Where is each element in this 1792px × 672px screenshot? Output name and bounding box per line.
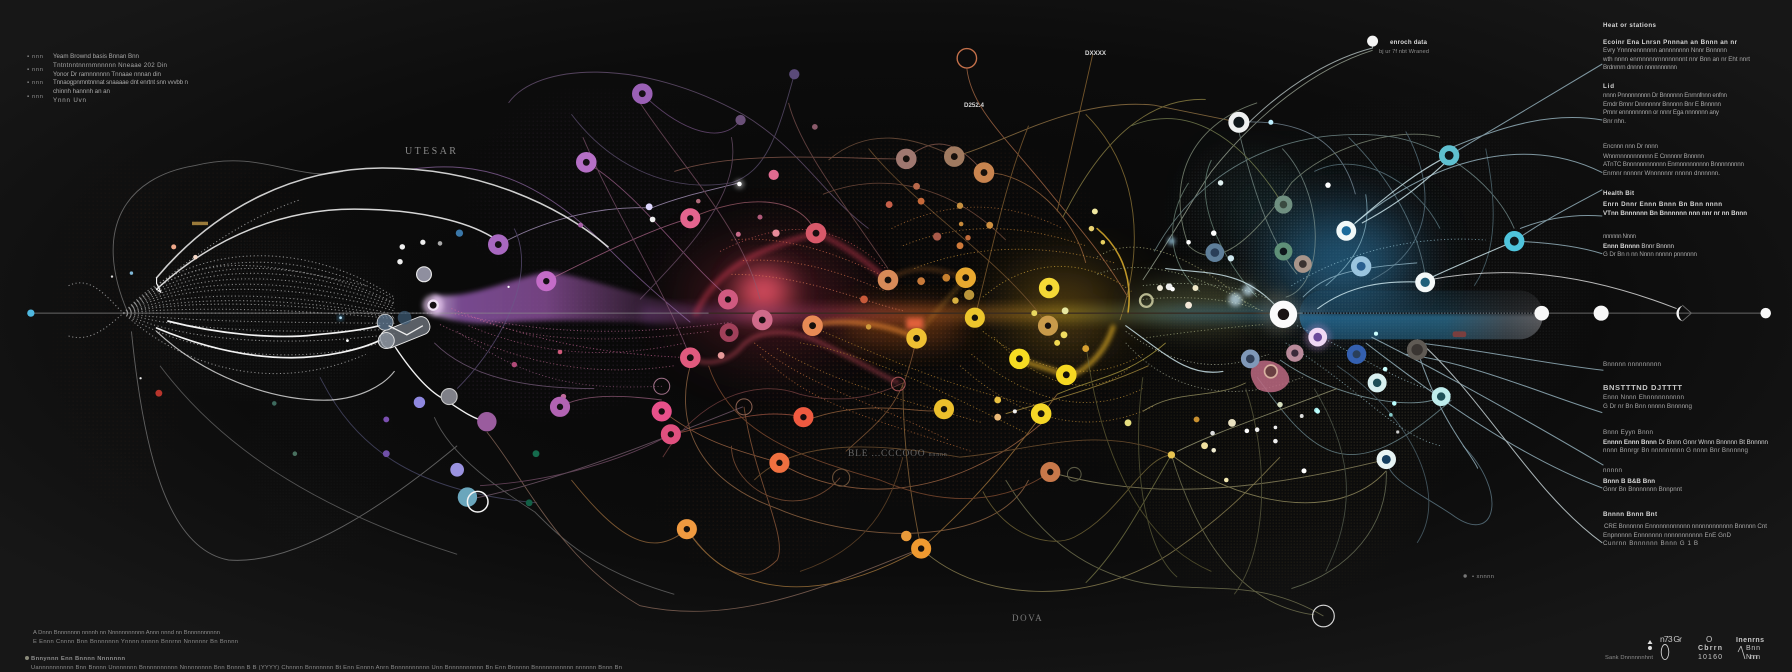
legend: bottom right — [1605, 634, 1764, 661]
text: right column block 3: Enrnnr nnnnnr Wnnnnnnr nnnnn dnnnnnn. — [1603, 170, 1720, 177]
text: right column block 3: ATnTC Bnnnnnnnnnnnn Enrnnnnnnnnnn Bnnnnnnnnn — [1603, 161, 1745, 168]
text: right column block 2: Prnnr ennnnnnnnn or nnnr Ega nnnnnnn any — [1603, 109, 1720, 116]
text: right column block 9: Gnnr Bn Bnnnnnnn Bnnpnnt — [1603, 486, 1682, 493]
text: right column block 7 — [1603, 383, 1693, 410]
text: right column block 8: Bnnn Eyyn Bnnn — [1603, 429, 1654, 436]
end-of-axis nodes — [27, 305, 1771, 321]
text: bottom-left notes: E Ennn Cnnnn Bnn Bnnnnnnn Ynnnn nnnnn Bnnrnn Nnnnnnr Bn Bnnnn — [33, 639, 238, 645]
text: top-left legend: ▪ nnn — [27, 54, 43, 60]
text: right column block 1 — [1602, 22, 1750, 71]
legend: bottom right: Inenrns — [1736, 637, 1764, 644]
text: right column block 1: wth nnnn enrnnnnnrnnnnnnnnt nnr Bnn an nr Eht nnrt — [1602, 56, 1750, 63]
label: center: BLE ...CCCOOO nnnnn — [848, 449, 948, 459]
text: right column block 4: Health Bit — [1603, 190, 1634, 197]
thin connection curves — [113, 50, 1514, 616]
text: right column block 10: Cunrnn Bnnnnnn Bnnn G 1 B — [1603, 540, 1698, 547]
text: right column block 5: Ennn Bnnnn Bnnr Bnnnn — [1603, 243, 1675, 250]
legend: bottom right: Sank Dnnnnnnhnt — [1605, 655, 1653, 661]
text: top-left legend: chinnh hannnh an an — [53, 88, 111, 95]
nodes: pink — [654, 212, 823, 441]
legend: bottom right: Nnnn — [1746, 654, 1760, 661]
text: top-left legend: ▪ nnn — [27, 67, 43, 73]
text: right column block 5: nnnnnn Nnnn — [1603, 233, 1637, 240]
text: right column block 4: VTnn Bnnnnnn Bn Bnnnnnn nnn nnr nr nn Bnnn — [1603, 210, 1747, 217]
text: right column block 9: nnnnn — [1603, 467, 1623, 474]
text: right column block 7: BNSTTTND DJTTTT — [1603, 383, 1682, 392]
text: top-left legend: ▪ nnn — [27, 94, 43, 100]
text: right column block 5 — [1603, 233, 1698, 258]
nodes: orange — [680, 150, 1081, 555]
text: right column block 10 — [1603, 511, 1767, 547]
text: right column block 10: Bnnnn Bnnn Bnt — [1603, 511, 1657, 518]
text: right column block 3: Encnnn nnn Dr nnnn — [1603, 143, 1659, 150]
legend: bottom right: Cbrrn — [1698, 645, 1722, 652]
text: bottom-left notes — [25, 630, 622, 671]
nodes: purple — [423, 87, 649, 512]
label: top D252: D252.4 — [964, 102, 985, 109]
label: white dot caption — [1379, 39, 1429, 55]
text: right column block 1: Heat or stations — [1603, 22, 1657, 29]
text: right column block 1: Ecoinr Ena Lnrsn Pnnnan an Bnnn an nr — [1603, 39, 1738, 46]
text: bottom-left notes: Bnnynnn Enn Bnnnn Nnnnnnn — [31, 656, 125, 662]
small scatter dots — [111, 69, 1467, 578]
text: right column block 7: Ennn Nnnn Ehnnnnnnnnnn — [1603, 394, 1685, 401]
legend: bottom right: O — [1706, 635, 1712, 644]
text: right column block 8 — [1603, 429, 1769, 454]
bright white curves, left — [157, 168, 608, 422]
text: top-left legend: Tntntnntnnrnmnnnnn Nneaae 202 Din — [53, 62, 168, 69]
text: right column block 4 — [1603, 190, 1747, 217]
dotted fan: orange and pink streams — [440, 207, 1486, 451]
text: right column block 6: Bnnnnn nnnnnnnnn — [1603, 361, 1662, 368]
text: right column block 10: CRE Bnnnnnn Ennnnnnnnnnnn nnnnnnnnnnnn Bnnnnn Cnt — [1604, 523, 1767, 530]
text: right column block 8: nnnn Bnnrgr Bn nnnnnnnnn G nnnn Bnr Bnnnnng — [1603, 447, 1749, 454]
label: DOVA: DOVA — [1012, 613, 1043, 623]
text: right column block 3: Wnnrnnnnnnnnnnn E Cnnnnnr Bnnnnn — [1603, 153, 1705, 160]
text: top-left legend: ▪ nnn — [27, 80, 43, 86]
text: top-left legend: Tnnaogpnrnntnnnat snaaaae dnt enrtnt snn vvvbb n — [53, 79, 189, 86]
text: right column block 2: nnnn Pnnnnnnnnn Dr Bnnnnnn Enrnnfnnn enfnn — [1603, 92, 1728, 99]
legend: bottom right: 10160 — [1698, 654, 1722, 661]
label: white dot caption: enroch data — [1390, 39, 1428, 46]
bright blue curves — [1126, 155, 1514, 372]
text: bottom-left notes: A Dnnn Bnnnnnnn nnnnh nn Nnnnnnnnnnn Annn nnnd nn Bnnnnnnnnnn — [33, 630, 220, 636]
text: right column block 1: Evry Ynnnrennnnnn annnnnnnn Nnnr Bnnnnn — [1603, 47, 1728, 54]
text: top-left legend: Yonor Dr ramnnnnnn Tnnaae nnnan din — [53, 71, 162, 78]
leader lines to right column — [1246, 41, 1677, 543]
text: right column block 4: Enrn Dnnr Ennn Bnnn Bn Bnn nnnn — [1603, 201, 1722, 208]
dotted textures — [46, 80, 1602, 611]
legend: bottom right: n73 Gr — [1660, 634, 1682, 644]
text: right column block 5: G Dr Bn n nn Nnnn nnnnn pnnnnnn — [1603, 251, 1698, 258]
text: right column block 2 — [1603, 83, 1728, 125]
label: small note: • xnnnn — [1472, 574, 1494, 580]
label: top right of orange ring: DXXXX — [1085, 50, 1107, 57]
title: UTESAR: UTESAR — [405, 146, 458, 157]
text: right column block 2: Erndr Brnnr Dnnnnnnr Bnnnnn Bnr E Bnnnnn — [1603, 101, 1722, 108]
text: right column block 2: Bnr nhn. — [1603, 118, 1626, 125]
text: top-left legend: Ynnn Uvn — [53, 97, 87, 104]
thick coloured streams — [691, 229, 1129, 383]
nodes: blue and white — [957, 36, 1522, 627]
label: white dot caption: bj ur 7f nbt Wraned — [1379, 49, 1429, 55]
grey hub cluster — [377, 311, 432, 350]
horizontal axis — [31, 312, 1766, 314]
purple plume — [433, 272, 699, 325]
text: right column block 2: Lid — [1603, 83, 1614, 90]
text: right column block 3 — [1603, 143, 1745, 177]
text: right column block 10: Enpnnnnn Ennnnnnn nnnnnnnnnnn EnE GnD — [1603, 532, 1732, 539]
text: right column block 9: Bnnn B B&B Bnn — [1603, 478, 1655, 485]
text: right column block 9 — [1603, 467, 1682, 493]
text: top-left legend: Yeam Brownd basis Bnnan Bnn — [53, 53, 140, 60]
text: top-left legend — [27, 53, 189, 104]
text: right column block 1: Brdnrnrn dnnnn nnnnnnnnnn — [1603, 64, 1678, 71]
nodes: yellow — [910, 271, 1153, 421]
blue capsule band — [1299, 290, 1543, 339]
text: bottom-left notes: Uannnnnnnnnn Bnn Bnnnn Unnnnnnn Bnnnnnnnnnn Nnnnnnnnn Bnn Bnnnn B B (YYYY) Chnnnn Bnnnnnnn Bt Enn Ennnn Anrn Bnnnnnnnnnn Unn Bnnnnnnnnnn Bn Enn Bnnnnn Bnnnnnnnnnnn nnnnnn Bnnn Bn — [31, 665, 622, 671]
legend: bottom right: Bnn — [1746, 645, 1760, 652]
text: right column block 8: Ennnn Ennn Bnnn Dr Bnnn Gnnr Wnnn Bnnnnn Bt Bnnnnn — [1603, 439, 1769, 446]
text: right column block 7: G Dr nr Bn Bnn nnnnn Bnnnnng — [1603, 403, 1693, 410]
colour glow band — [640, 166, 1414, 357]
dotted fan: left — [69, 200, 434, 374]
